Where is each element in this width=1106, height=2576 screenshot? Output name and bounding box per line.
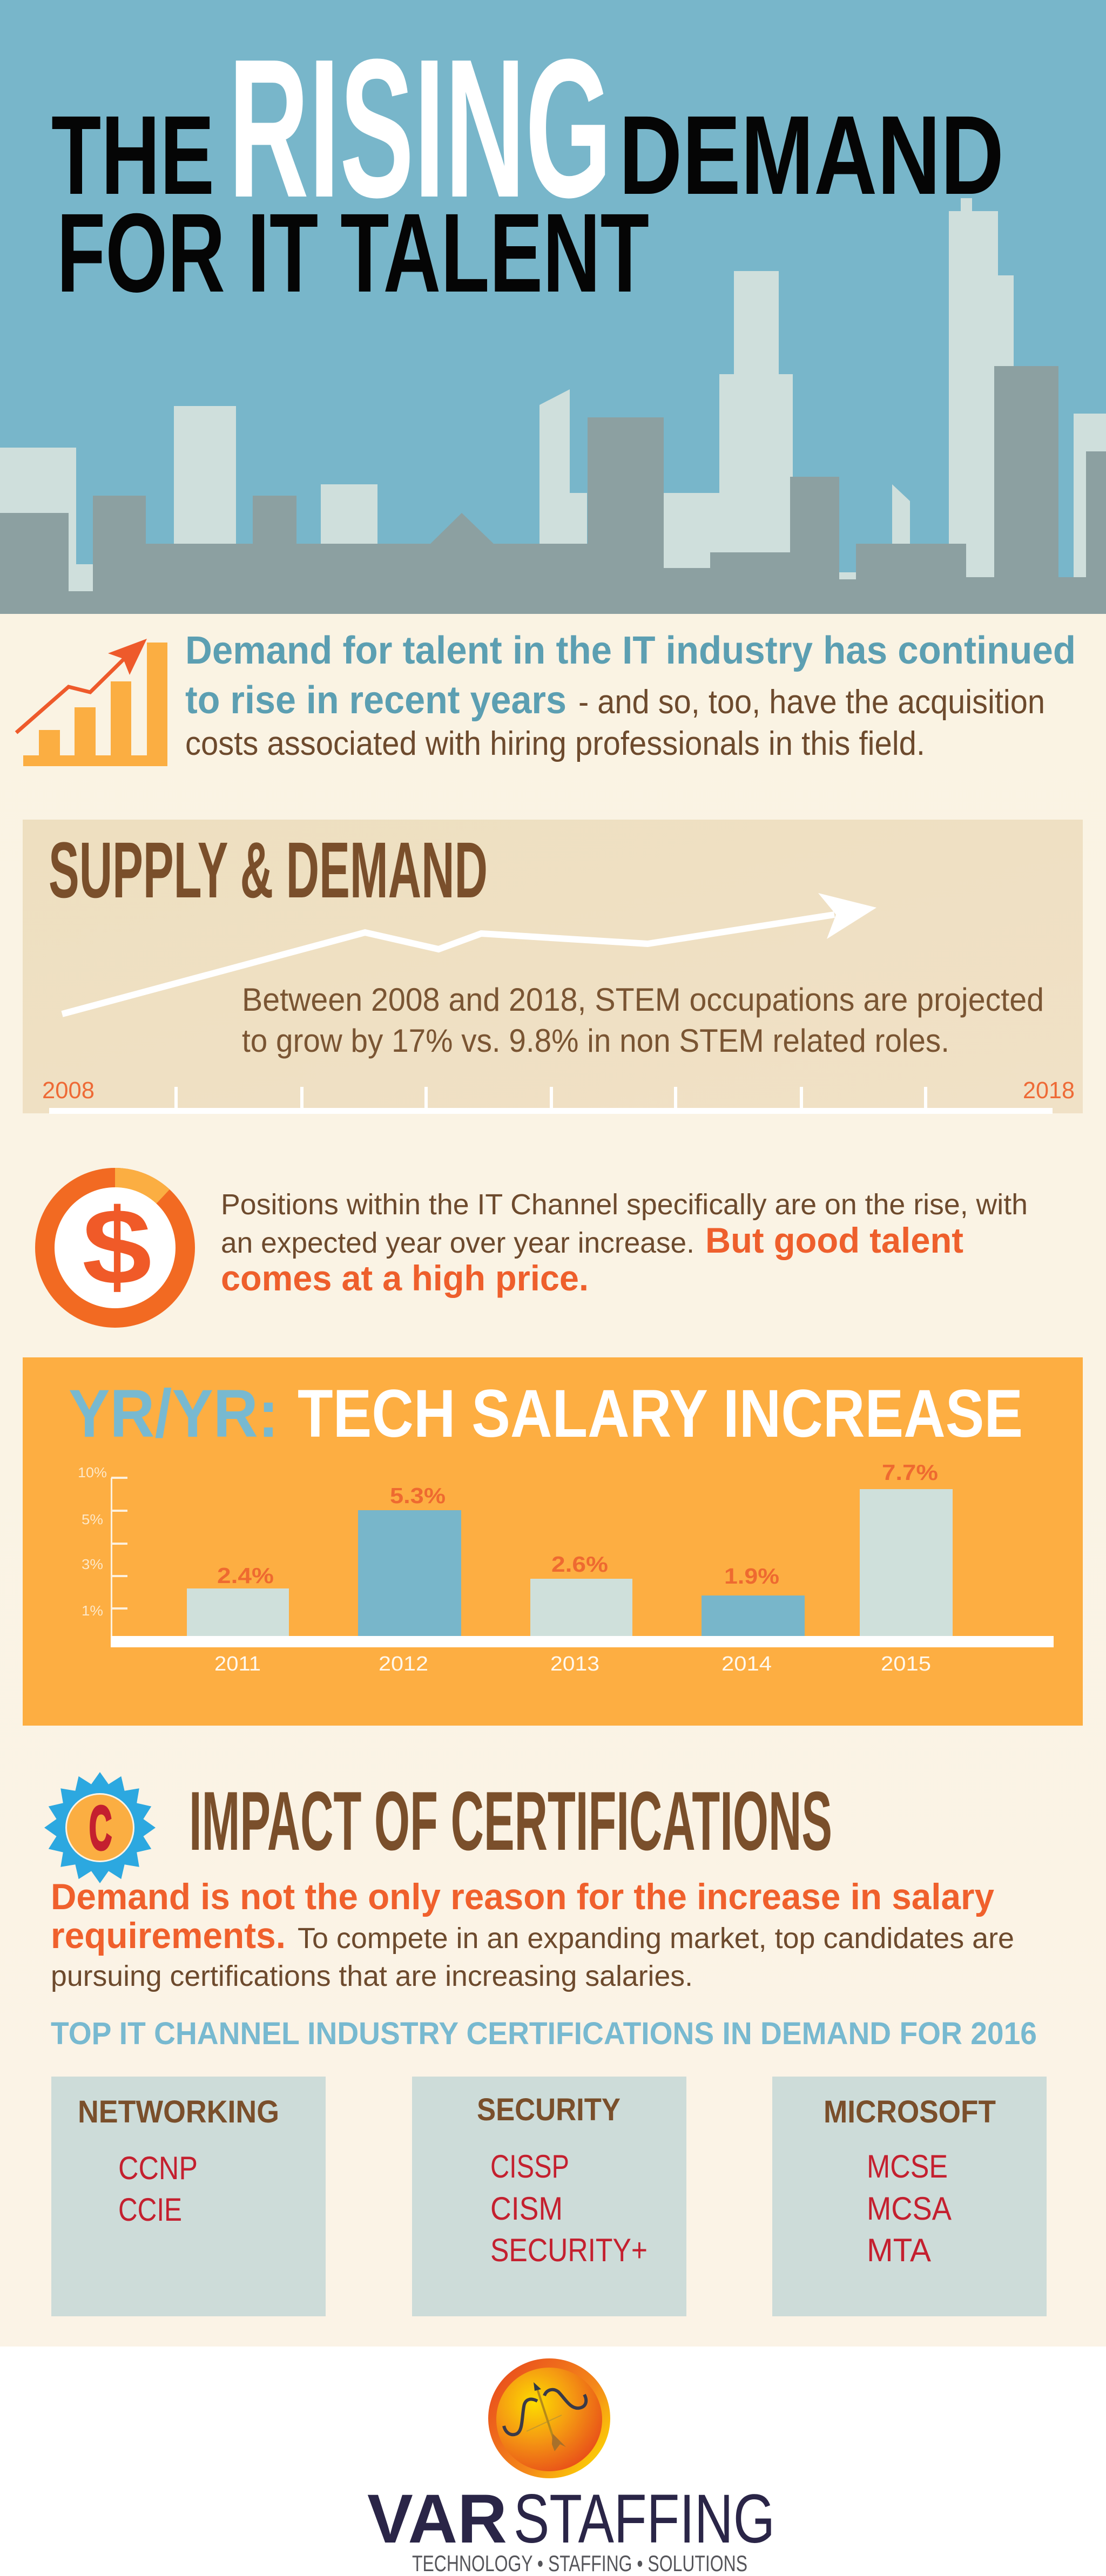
icon: rising bar chart with arrow (16, 639, 167, 766)
icon: certification seal: C (89, 1794, 112, 1863)
y axis: 3% (82, 1556, 103, 1572)
sky (0, 0, 1106, 614)
year labels: 2012 (379, 1653, 428, 1675)
panel: tech salary increase (23, 1357, 1083, 1726)
year labels: 2015 (881, 1653, 931, 1675)
year labels: 2013 (550, 1653, 599, 1675)
year labels (214, 1653, 931, 1675)
title: RISING (228, 18, 612, 239)
icon: certification seal (44, 1772, 156, 1883)
title: THE (51, 93, 214, 218)
header panel: skyline (0, 0, 1106, 614)
wordmark: VAR (367, 2480, 507, 2558)
heading: YR/YR: (69, 1376, 279, 1451)
year labels: 2011 (214, 1653, 261, 1675)
intro text: - and so, too, have the acquisition (578, 684, 1045, 721)
heading (69, 1376, 1023, 1451)
footer background (0, 2347, 1106, 2576)
panel: networking: NETWORKING (78, 2094, 279, 2129)
certifications text (51, 1876, 1014, 1992)
bar chart (78, 1460, 1054, 1675)
panel: security (412, 2077, 686, 2316)
value labels: 7.7% (882, 1460, 938, 1485)
panel: microsoft: MTA (867, 2232, 931, 2268)
panel: microsoft: MCSA (867, 2190, 952, 2227)
value labels: 5.3% (390, 1483, 446, 1508)
timeline (42, 1077, 1075, 1114)
intro text: costs associated with hiring professionals in this field. (185, 725, 925, 762)
description: to grow by 17% vs. 9.8% in non STEM related roles. (242, 1023, 949, 1059)
year labels: 2014 (721, 1653, 772, 1675)
certifications text: requirements. (51, 1915, 286, 1956)
rising positions text: comes at a high price. (221, 1258, 589, 1298)
page background (0, 614, 1106, 2347)
intro text: to rise in recent years (185, 679, 567, 722)
panel: networking: CCIE (118, 2192, 182, 2228)
panel: security: SECURITY (477, 2092, 621, 2127)
intro text (185, 629, 1076, 762)
rising positions text (221, 1188, 1028, 1298)
value labels: 2.6% (551, 1552, 608, 1577)
wordmark (367, 2480, 775, 2558)
panel: supply and demand (23, 820, 1083, 1114)
rising positions text: But good talent (705, 1220, 963, 1260)
rising positions text: Positions within the IT Channel specifically are on the rise, with (221, 1188, 1028, 1221)
baseline (111, 1636, 1054, 1647)
y axis: 1% (82, 1603, 103, 1619)
certifications text: pursuing certifications that are increasing salaries. (51, 1960, 693, 1992)
title (51, 18, 1004, 316)
panel: microsoft: MICROSOFT (824, 2094, 996, 2129)
title: FOR IT TALENT (57, 191, 649, 316)
y axis: 5% (82, 1511, 103, 1527)
light buildings (0, 198, 1106, 599)
icon: dollar ring (35, 1168, 195, 1328)
logo emblem (488, 2358, 610, 2478)
y axis: 10% (78, 1464, 107, 1480)
description: Between 2008 and 2018, STEM occupations are projected (242, 982, 1044, 1018)
title: DEMAND (619, 93, 1004, 218)
value labels: 2.4% (217, 1563, 274, 1588)
wordmark: STAFFING (514, 2480, 775, 2558)
panel: networking (51, 2077, 326, 2316)
certifications text: To compete in an expanding market, top candidates are (298, 1922, 1014, 1955)
y axis (78, 1464, 127, 1637)
value labels (217, 1460, 938, 1588)
timeline: 2018 (1023, 1077, 1075, 1104)
panel: networking: CCNP (118, 2150, 198, 2186)
subheading: top certifications: TOP IT CHANNEL INDUSTRY CERTIFICATIONS IN DEMAND FOR 2016 (51, 2016, 1037, 2051)
intro text: Demand for talent in the IT industry has continued (185, 629, 1076, 672)
timeline: 2008 (42, 1077, 95, 1104)
rising positions text: an expected year over year increase. (221, 1227, 694, 1259)
logo: VAR Staffing (367, 2358, 775, 2576)
trend arrow (62, 893, 876, 1014)
panel: microsoft (772, 2077, 1047, 2316)
tagline: TECHNOLOGY • STAFFING • SOLUTIONS (412, 2551, 747, 2576)
panel: security: CISSP (490, 2148, 569, 2185)
panel: security: SECURITY+ (490, 2232, 648, 2268)
heading: SUPPLY & DEMAND (49, 826, 488, 915)
bars (187, 1489, 953, 1637)
description (242, 982, 1044, 1059)
dark buildings (0, 366, 1106, 614)
panel: microsoft: MCSE (867, 2148, 948, 2185)
icon: dollar ring: $ (82, 1187, 152, 1307)
value labels: 1.9% (724, 1564, 779, 1588)
panel: security: CISM (490, 2190, 563, 2227)
certifications text: Demand is not the only reason for the increase in salary (51, 1876, 994, 1917)
